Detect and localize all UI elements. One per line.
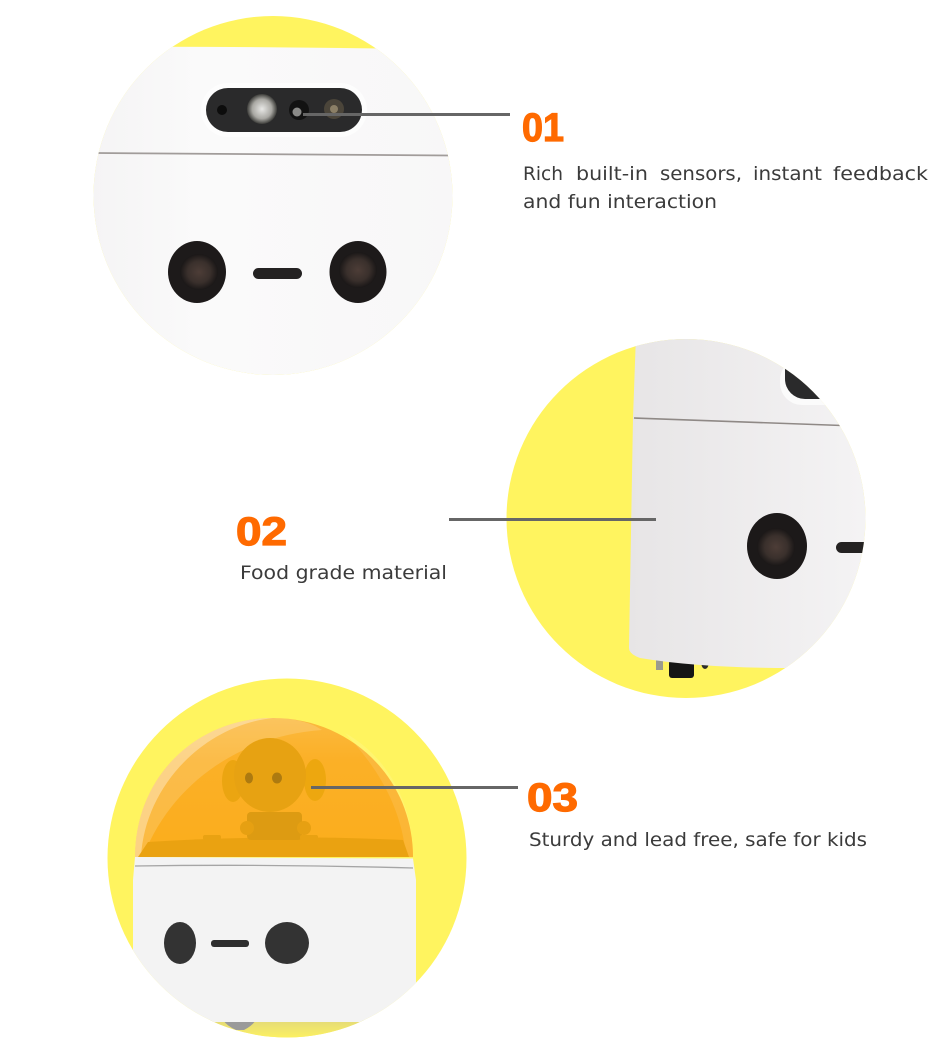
number 02: 02	[236, 510, 287, 554]
mouth slot	[211, 940, 249, 947]
shell seam	[96, 153, 450, 156]
panel: lead free circle photo	[100, 675, 475, 1045]
left eye sensor	[168, 241, 226, 303]
upper sensor halo	[780, 368, 825, 405]
white body	[133, 857, 416, 1022]
sensor window halo	[201, 83, 367, 137]
robot body side	[629, 330, 880, 668]
robot foot	[224, 1022, 254, 1030]
leader line 03	[311, 786, 518, 789]
bottom connectors	[656, 659, 708, 678]
small robot figure inside dome	[203, 738, 326, 840]
right eye sensor	[330, 241, 386, 303]
mouth slot	[836, 542, 864, 553]
shell seam	[135, 865, 413, 868]
panel: material circle photo	[506, 339, 866, 698]
amber dome	[135, 718, 413, 857]
text 01: sensors,	[660, 163, 742, 185]
text 02: Food grade material	[240, 562, 447, 584]
left eye	[164, 922, 196, 964]
text 03: Sturdy and lead free, safe for kids	[529, 829, 867, 851]
leader line 02	[449, 518, 656, 521]
sensor window	[206, 88, 362, 132]
text 01: Rich	[523, 163, 563, 185]
text 01: instant	[753, 163, 822, 185]
text 01: built-in	[576, 163, 648, 185]
robot top shell	[90, 47, 460, 380]
shell seam	[634, 418, 842, 426]
text 01: and fun interaction	[523, 191, 717, 213]
number 01: 01	[522, 106, 564, 150]
mouth slot	[253, 268, 302, 279]
upper sensor window	[785, 368, 820, 399]
panel: sensors circle photo	[90, 10, 460, 380]
right eye	[265, 922, 309, 964]
ground shadow	[210, 1020, 364, 1038]
leader line 01	[303, 113, 510, 116]
text 01: feedback	[833, 163, 928, 185]
number 03: 03	[527, 776, 578, 820]
eye sensor	[747, 513, 807, 579]
